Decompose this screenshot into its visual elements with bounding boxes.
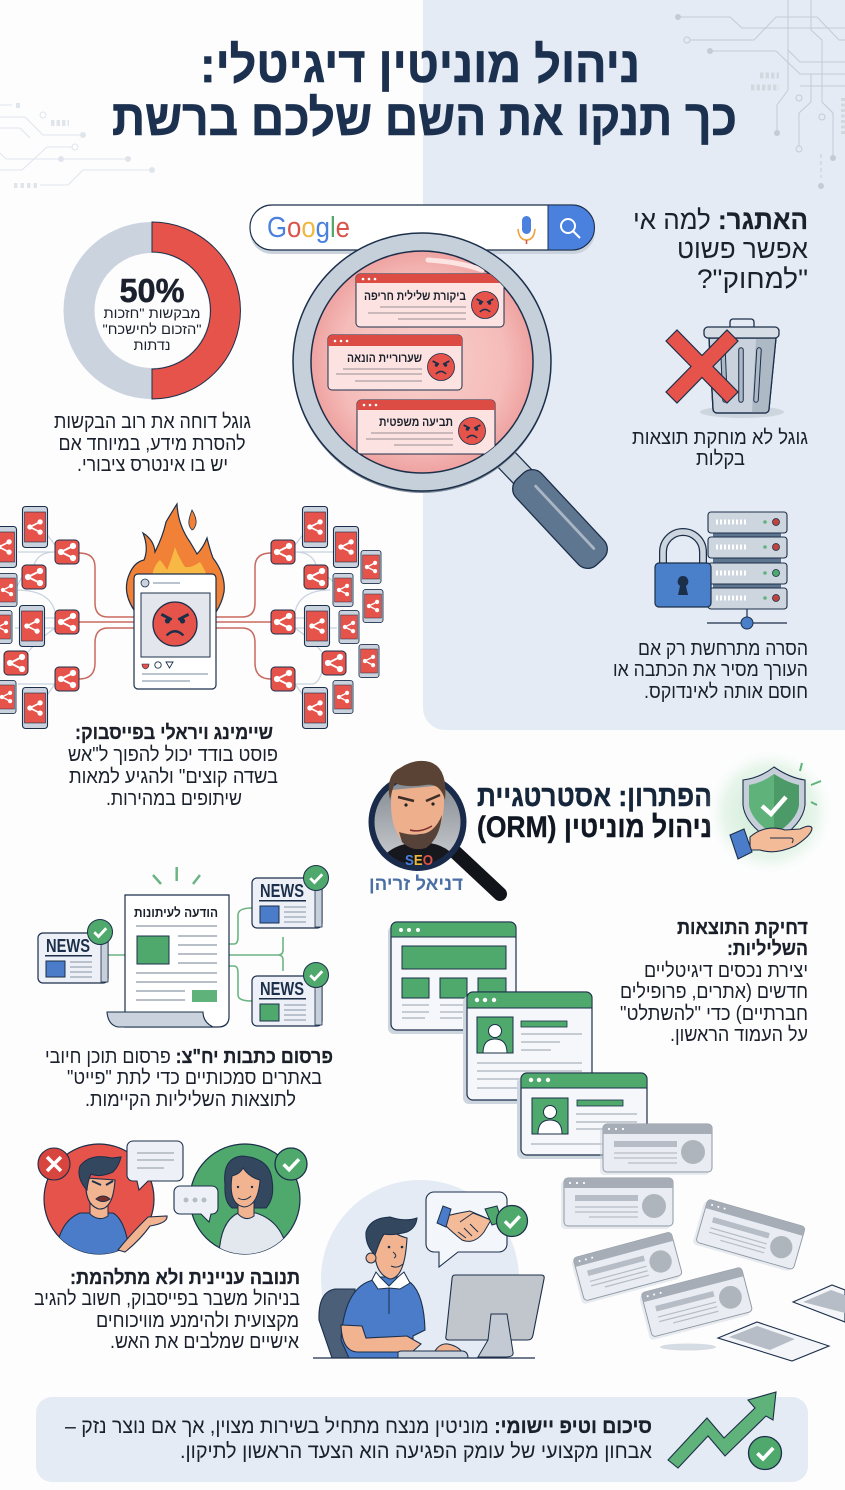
heading: the solution: הפתרון: אסטרטגיית	[477, 780, 712, 813]
donut label: "הזכום לחישכח"	[102, 321, 202, 337]
text: Google does not delete	[632, 427, 808, 470]
website window 1	[388, 922, 516, 1034]
text: viral shaming on Facebook: בשדה קוצים" ולהגיע למאות	[69, 766, 278, 788]
share nodes left	[4, 540, 79, 691]
donut label: נדתות	[134, 337, 170, 353]
text: pushing down negative results: חברתיים) כדי "להשתלט"	[620, 1003, 808, 1025]
title: ניהול מוניטין דיגיטלי:	[200, 37, 640, 93]
magnifying glass	[293, 233, 613, 574]
icon: search	[561, 219, 580, 238]
icon: microphone	[518, 216, 535, 244]
heading: the challenge: אפשר פשוט	[677, 234, 808, 264]
icon: handshake	[437, 1206, 502, 1241]
news card left	[38, 920, 112, 983]
phones left	[0, 506, 48, 728]
text: factual response	[34, 1267, 300, 1353]
summary text: סיכום וטיפ יישומי: מוניטין מנצח מתחיל בשירות מצוין, אך אם נוצר נזק –	[65, 1415, 652, 1438]
result card: fraud rumor: שערוריית הונאה	[347, 351, 422, 365]
text: Google rejects most requests: יש בו אינטרס ציבורי.	[77, 454, 228, 476]
icon: trash can with red X	[666, 319, 784, 418]
text: press articles: לתוצאות השליליות הקיימות.	[85, 1089, 296, 1111]
share nodes right	[271, 540, 346, 691]
text: viral shaming on Facebook: שיימינג ויראלי בפייסבוק:	[75, 722, 273, 744]
monitor	[446, 1275, 544, 1357]
text: Google rejects most requests: גוגל דוחה את רוב הבקשות	[54, 411, 251, 433]
viral shaming network	[0, 504, 383, 728]
desk line	[313, 1357, 535, 1359]
text: Google rejects most requests: להסרת מידע, במיוחד אם	[58, 433, 246, 455]
text: pushing down negative results: דחיקת התוצאות	[677, 917, 808, 939]
illustration: man at computer	[313, 1180, 544, 1378]
badge: check	[275, 1148, 307, 1180]
SEO text: SEO	[405, 852, 433, 869]
summary text: אבחון מקצועי של עומק הפגיעה הוא הצעד הראשון לתיקון.	[180, 1440, 652, 1463]
post card with angry face	[134, 574, 216, 689]
news card bottom right	[252, 962, 328, 1026]
text: press articles	[45, 1046, 333, 1111]
heading: the challenge: האתגר: למה אי	[633, 205, 808, 235]
faded results	[561, 1124, 845, 1361]
badge: check	[496, 1206, 528, 1236]
text: removal conditions: העורך מסיר את הכתבה או	[613, 659, 808, 681]
result card: lawsuit: תביעה משפטית	[379, 415, 453, 429]
title	[112, 37, 737, 146]
panel: summary and tip	[36, 1392, 808, 1482]
website window 3	[517, 1073, 647, 1159]
text: viral shaming on Facebook: שיתופים במהירות.	[106, 788, 242, 810]
text: pushing down negative results: חדשים (אתרים, פרופילים	[620, 981, 808, 1003]
website stack	[388, 922, 845, 1361]
chair	[319, 1289, 355, 1358]
text: removal conditions: חוסם אותה לאינדוקס.	[644, 681, 808, 703]
decoration: circuit lines top left	[0, 103, 155, 186]
phones right	[302, 506, 383, 728]
result card: lawsuit	[357, 400, 495, 454]
angry man circle	[38, 1141, 183, 1256]
result card: negative review	[356, 274, 504, 327]
website window 2	[463, 992, 592, 1104]
author name: דניאל זריהן	[369, 874, 463, 895]
rays	[153, 867, 200, 884]
text: pushing down negative results: על העמוד הראשון.	[670, 1024, 808, 1046]
donut label: מבקשות "חזכות	[104, 305, 200, 321]
donut chart: 50 percent	[79, 222, 240, 399]
heading: the challenge: "למחוק"?	[697, 264, 808, 294]
logo: Daniel Zrihen SEO magnifier	[369, 761, 500, 895]
text: pushing down negative results: יצירת נכסים דיגיטליים	[644, 960, 808, 982]
text: factual response: בניהול משבר בפייסבוק, חשוב להגיב	[34, 1288, 300, 1310]
heading: the solution: ניהול מוניטין (ORM)	[477, 811, 712, 844]
result card: negative review: ביקורת שלילית חריפה	[364, 289, 466, 303]
heading: the solution	[477, 780, 712, 844]
icon: server rack with padlock	[655, 512, 787, 629]
speech bubble: calm	[174, 1186, 218, 1222]
badge: X	[38, 1148, 70, 1180]
search bar	[250, 205, 595, 254]
speech bubble: handshake	[426, 1192, 507, 1267]
text: press articles: פרסום כתבות יח"צ: פרסום תוכן חיובי	[45, 1046, 333, 1068]
text: Google does not delete: גוגל לא מוחקת תוצאות	[632, 427, 808, 449]
title: כך תנקו את השם שלכם ברשת	[112, 90, 737, 146]
connectors	[79, 553, 271, 679]
icon: rising arrow with check	[668, 1392, 782, 1470]
text: press articles: באתרים סמכותיים כדי לתת "פייט"	[67, 1067, 322, 1089]
panel: challenge background	[423, 0, 845, 730]
text: factual response: מקצועית ולהימנע מוויכוחים	[96, 1310, 299, 1332]
press release sheet: הודעה לעיתונות	[134, 905, 218, 920]
illustration: angry versus calm response	[38, 1141, 307, 1256]
donut label: 50%	[120, 272, 184, 309]
press release illustration	[38, 866, 328, 1027]
text: Google does not delete: בקלות	[696, 448, 745, 470]
text: Google rejects most requests	[54, 411, 251, 476]
speech bubble: angry	[127, 1141, 183, 1190]
man	[341, 1217, 462, 1358]
donut label	[102, 272, 202, 353]
text: removal conditions: הסרה מתרחשת רק אם	[638, 638, 808, 660]
result card: fraud rumor	[328, 335, 462, 390]
logo: Google wordmark: Google	[267, 212, 350, 244]
heading: the challenge	[633, 205, 808, 294]
press release sheet	[107, 895, 229, 1027]
decoration: circuit lines top right	[675, 0, 845, 189]
connectors	[108, 908, 283, 1001]
text: pushing down negative results: השליליות:	[727, 938, 808, 960]
icon: flames	[126, 504, 224, 612]
text: viral shaming on Facebook: פוסט בודד יכול להפוך ל"אש	[68, 744, 278, 766]
news card top right	[252, 866, 328, 928]
keyboard	[398, 1351, 468, 1358]
text: factual response: אישיים שמלבים את האש.	[110, 1331, 299, 1353]
text: removal conditions	[613, 638, 808, 703]
summary text	[65, 1415, 652, 1463]
icon: shield held in hand	[704, 746, 836, 878]
calm woman circle	[174, 1144, 307, 1256]
text: factual response: תנובה עניינית ולא מתלהמת:	[70, 1267, 300, 1289]
text: pushing down negative results	[620, 917, 808, 1046]
text: viral shaming on Facebook	[68, 722, 278, 810]
